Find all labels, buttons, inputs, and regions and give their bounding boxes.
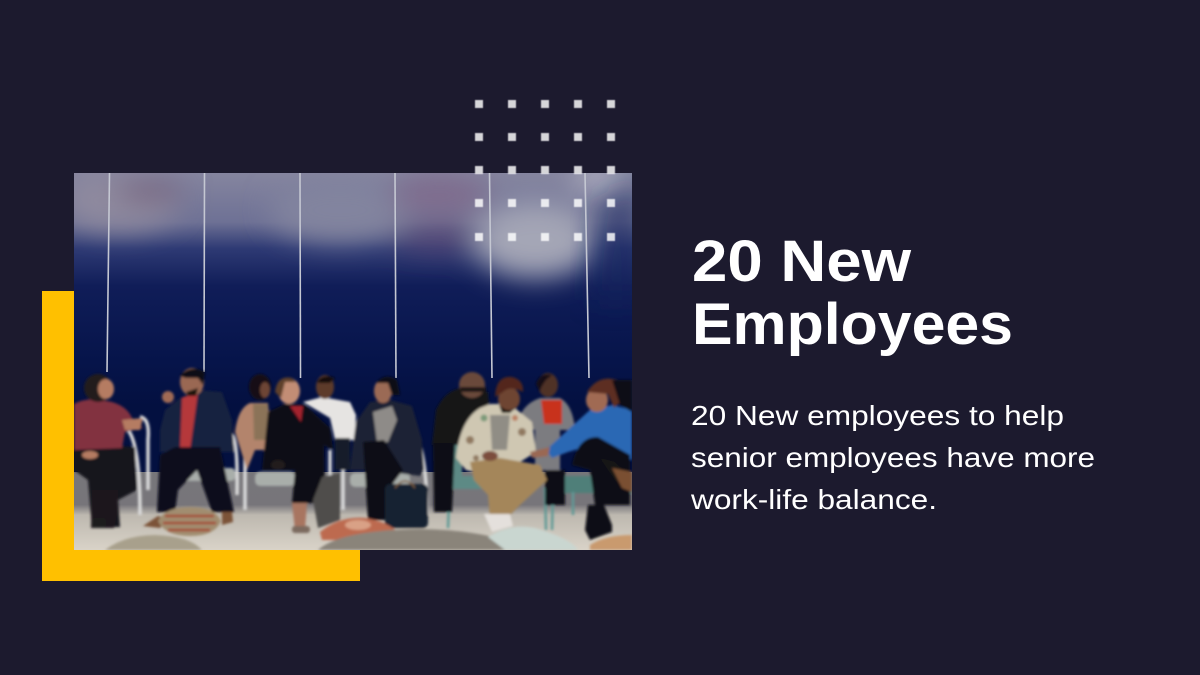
backpack [313, 473, 340, 528]
person: man in navy jacket [143, 368, 234, 528]
title [692, 229, 1013, 357]
person: man in patterned shirt [456, 377, 547, 532]
body text: work-life balance. [690, 484, 937, 515]
person: woman in black, legs crossed [262, 378, 333, 533]
body text: 20 New employees to help [691, 400, 1064, 431]
body text: senior employees have more [691, 442, 1095, 473]
white chairs [128, 417, 427, 515]
person: woman in tan jacket [235, 374, 272, 470]
slide [42, 99, 1094, 581]
person: man in white shirt [303, 375, 356, 470]
person: bald man in black [432, 372, 492, 512]
floor cushions [105, 507, 632, 550]
photo: team seated in a row of chairs [60, 166, 640, 550]
yellow accent block [42, 291, 360, 581]
person: woman in maroon top [74, 374, 143, 528]
person: woman in grey and red [518, 373, 575, 505]
chair seats [175, 468, 410, 487]
title: Employees [692, 292, 1013, 357]
teal chairs [444, 442, 632, 532]
person: woman in dark coat [350, 377, 428, 528]
body text [690, 400, 1095, 515]
person: woman in blue jacket [530, 379, 632, 540]
title: 20 New [692, 229, 912, 294]
dot grid decoration [475, 100, 615, 241]
